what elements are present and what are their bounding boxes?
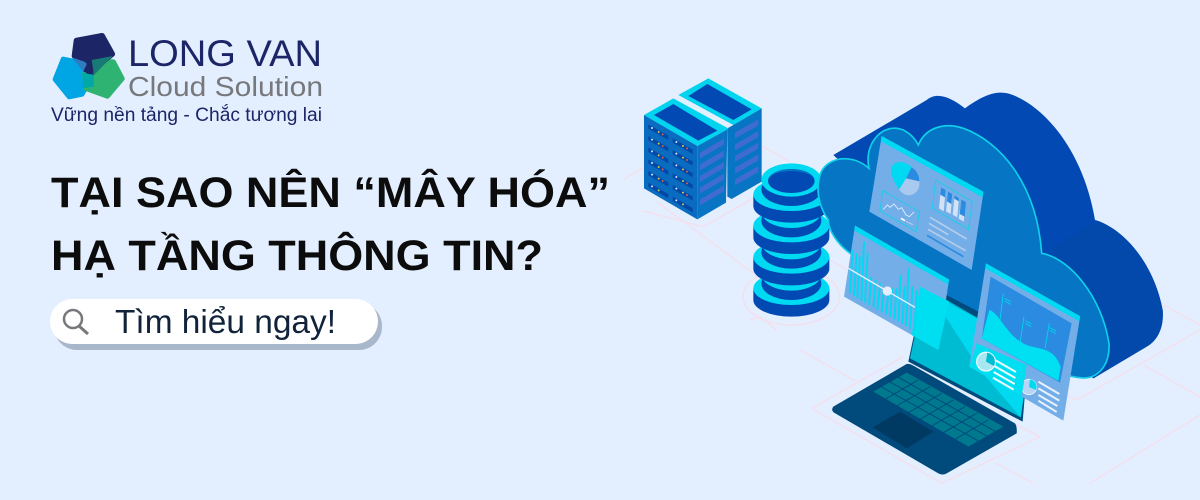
logo wordmark: LONG VAN (128, 33, 322, 74)
icon: front server rack (644, 98, 729, 219)
illustration: cloud computing scene (623, 78, 1200, 483)
title line 2: HẠ TẦNG THÔNG TIN? (51, 231, 543, 280)
panel: area chart window (969, 263, 1080, 421)
search text: Tìm hiểu ngay! (115, 303, 336, 340)
icon: back server rack (678, 78, 762, 199)
icon: laptop (832, 293, 1025, 474)
logo subtitle: Cloud Solution (128, 71, 323, 102)
chart: bars (932, 180, 972, 229)
search bar button (50, 299, 382, 350)
chart: sparkline (880, 191, 919, 232)
chart: pie (891, 162, 919, 195)
icon: magnifier (64, 310, 88, 334)
icon: logo mark (55, 36, 122, 97)
icon: cloud (818, 93, 1163, 378)
text lines (927, 217, 967, 257)
lower report card (1021, 379, 1059, 412)
icon: database stack (753, 163, 829, 317)
panel: cyan report card (969, 343, 1027, 397)
logo tagline: Vững nền tảng - Chắc tương lai (51, 104, 322, 126)
panel: dashboard with pie and bars (869, 136, 983, 270)
title line 1: TẠI SAO NÊN “MÂY HÓA” (51, 168, 610, 217)
title (51, 168, 610, 280)
logo (51, 33, 323, 126)
panel: equalizer chart (844, 226, 949, 350)
